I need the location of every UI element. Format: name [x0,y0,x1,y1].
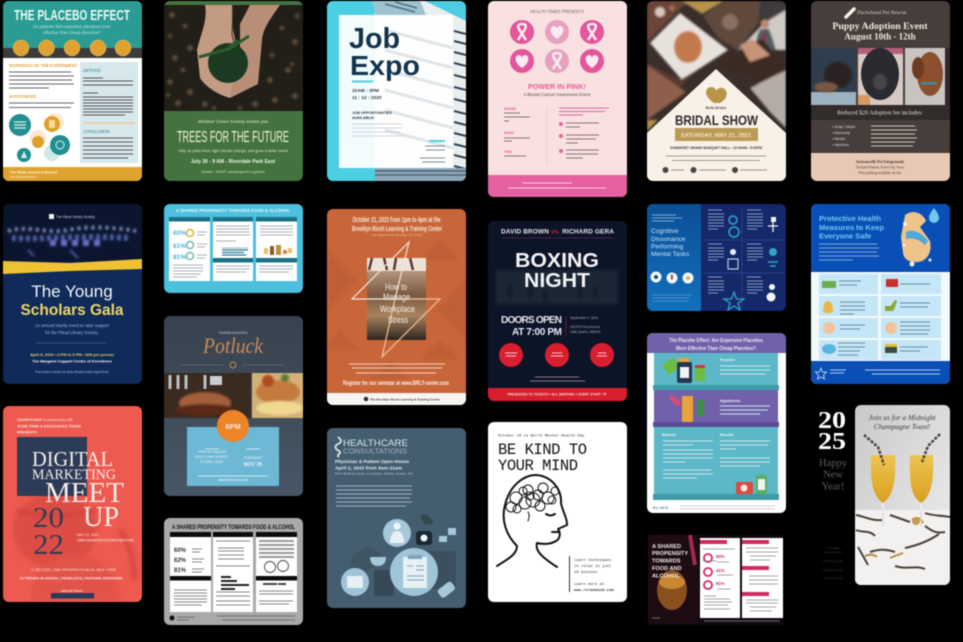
poster: How to Manage Workplace Stress [320,209,466,405]
poster: Be Kind to Your Mind [488,422,627,602]
poster: Job Expo: 11 : 12 : 2020 [352,95,382,101]
column panels [169,217,297,281]
section headings: Hypothesis [720,399,740,403]
side text: Learn more at [574,583,604,587]
date and venue: 302378 First Avenue [570,325,600,329]
icon grid: ribbons and hearts [510,20,604,73]
side text: 10 minutes [574,570,598,575]
poster: Power in Pink: WHEN [504,131,514,135]
headline [652,544,688,580]
photo [367,258,426,340]
champagne glasses [864,434,940,527]
event details: April 8, 2020 • 6 PM to 9 PM • $25 per person [30,352,115,357]
headline [32,447,124,533]
statistics: 60% [173,230,186,237]
organiser text: JOSIE PARK & ASSOCIATES TRADE [17,424,82,428]
text block: Windsor Green Society invites you [198,119,269,124]
date [77,533,135,542]
event details column: WHERE [504,107,516,111]
photo collage [647,1,786,131]
poster: Healthcare Consultations: Pima Medical Center of Lifestyle, Alvada, Ontario, WA [335,472,413,476]
section headings: Purpose [720,358,735,362]
poster: Thanksgiving Potluck [164,316,304,496]
footer strip [327,393,466,405]
event details [823,546,844,580]
icon: cupped hands with moss [197,5,280,98]
footer strip [488,388,627,401]
agenda column [559,108,609,115]
panel details: FLORAL PARK [200,460,224,464]
title: Measures to Keep [819,223,884,232]
poster: Thanksgiving Potluck: WWW.POTLUCK.COM [218,478,248,482]
date line: October 10 is World Mental Health Day [498,434,585,438]
footer band [811,361,950,384]
donut stats [704,554,712,589]
venue: SOMERSET GRAND BANQUET HALL • 10:00AM - 5:00PM [670,146,762,150]
year [33,502,64,561]
title: Dissonance [651,236,686,243]
tile icons [822,279,898,354]
page lines [703,548,778,611]
poster: Puppy Adoption Event: Free parking available on site [859,171,902,175]
greeting [819,458,848,492]
peach footer [811,153,950,181]
poster: Puppy Adoption Event [811,1,950,181]
poster: Digital Marketing Meet Up [3,406,142,602]
section headings [662,358,740,437]
event details: 65 Holly Street [823,568,843,572]
logo and heading: CONSULTATIONS [343,446,407,456]
sign-up button [51,589,94,598]
title: The Placebo Effect: Are Expensive Placebos [669,338,763,344]
fighter names: DAVID BROWN vs. RICHARD GERA [501,228,614,236]
sign-up button: SIGN UP TODAY [61,589,83,593]
subtitle: Do patients find expensive placebos more [33,24,112,29]
statistics: 60% [174,548,187,554]
table and text lines [216,541,250,605]
poster: Boxing Night: NIGHT [524,270,590,292]
cream panel [647,69,786,181]
title [819,214,884,240]
poster: 2025 champagne photo [855,405,950,585]
poster: Food and Alcohol, dark with pink: 41% [716,568,725,573]
title: Potluck [202,333,264,358]
poster: Bridal Show [647,1,786,181]
side text [574,558,614,593]
rescue name: Dachshund Pet Rescue [857,10,907,16]
headline: FOOD AND [652,566,682,572]
photo of person [13,492,134,602]
title: Cognitive [651,228,679,235]
poster: The Placebo Effect [3,1,142,181]
description [819,244,879,260]
poster: Trees for the Future: July 30 - 9 AM - Riverdale Park East [191,159,275,165]
poster: Puppy Adoption Event: August 10th - 12th [844,32,916,42]
poster: Healthcare Consultations: April 2, 2020 from 9am-11am [335,466,402,472]
opportunities text: JOB OPPORTUNITIES [352,111,392,115]
ticket line [530,377,585,381]
details: +1 352 5709 | 3382 PROSPECTS BLVD, NEW YORK [30,568,116,572]
event name: THANKSGIVING [218,330,248,335]
panel details: NOV 26 [244,462,262,468]
poster title in photo [380,282,415,325]
poster: Food and Alcohol, teal [164,204,303,293]
date banner: SATURDAY, MAY 21, 2021 [681,133,752,139]
icon row [13,40,131,56]
date: MAY 12, 2022 [77,533,99,537]
headline: TOWARDS [652,558,681,564]
orange time badge: 8PM [225,422,241,431]
medicine kit icon [736,475,767,494]
checklist: • Soap / Wash [832,125,855,129]
poster: Cognitive Dissonance [647,204,786,311]
poster: Food and Alcohol, dark with pink: 81% [716,581,725,586]
poster: How to Manage Workplace Stress: 155 Maple Street, Brooklyn, NY 11215 [372,233,422,237]
poster: The Young Scholars Gala: Scholars Gala [20,302,124,319]
poster: The Placebo Effect: The Ritual Journal of Science [10,170,58,174]
poster title in photo: Stress [388,315,408,325]
triangle pattern [320,240,466,380]
column panels [170,532,297,612]
poster: Power in Pink [488,1,627,197]
title [651,228,690,258]
statistics [174,548,187,574]
greeting: Year! [822,482,844,492]
statistics [173,230,186,261]
year: 22 [33,529,64,561]
photo of crowd [3,204,142,262]
dining photos [164,373,304,418]
poster: The Placebo Effect: HYPOTHESIS [9,94,36,99]
poster: Be Kind to Your Mind: YOUR MIND [498,457,578,475]
poster: Boxing Night: PRESENTED TO TICKETS + ALL SHIPPING + EVENT STAFF: TF [507,392,607,396]
banner [811,105,950,120]
left text column: WORKINGS OF THE EXPERIMENT [9,63,78,68]
poster: Protective Health Measures [811,204,950,384]
icons column [724,216,778,310]
pink headers [700,540,769,596]
year [818,408,846,455]
poster: Puppy Adoption Event: Reduced $20 Adoption fee includes: [837,110,923,116]
poster: Healthcare Consultations [327,428,466,608]
right panel: method and conclusion [80,62,138,163]
white pages [700,538,783,618]
text: brand: Bella Brides [706,106,726,110]
white panel [339,15,453,168]
pill bottle icons [662,357,705,422]
marble table [855,510,950,585]
orange time badge [217,410,249,442]
description lines [336,486,412,506]
poster: How to Manage Workplace Stress: The Brooklyn Ricoh Learning & Training Center [370,398,441,402]
poster: How to Manage Workplace Stress: Brooklyn Ricoh Learning & Training Center [352,224,442,233]
year: 20 [33,502,64,534]
icon: gold hearts [706,87,727,103]
date banner [675,128,758,141]
header: October 21, 2023 from 1pm to 4pm at the [352,215,441,224]
checklist: • Vaccines [832,143,849,147]
description lines [349,364,445,373]
icon and society name: The Ritual Library Society [56,215,95,219]
left photo [648,535,698,623]
headline: MARKETING [32,467,116,483]
checklist: • Neuter [832,137,846,141]
poster: The Young Scholars Gala: Purchase a ticket at www.ritualsociety.org/events [35,370,109,374]
circle icons [9,113,70,162]
poster: Placebo, shelves [647,333,786,513]
presenter line: HEALTH TIMES PRESENTS [530,9,584,14]
headline: MEET [45,477,124,509]
poster: Food and Alcohol, dark with pink: 60% [716,554,725,559]
event details: New York City [824,576,843,580]
grid of cards [703,208,784,308]
statistics: 61% [173,243,186,250]
icon: head with tangled brain [497,475,567,567]
title: POWER IN PINK! [528,82,586,91]
date and time: 10AM : 3PM [352,88,379,94]
title: A SHARED PROPENSITY TOWARDS FOOD & ALCOHOL [176,208,291,213]
headline: ALCOHOL [652,574,680,580]
arena photo [496,270,618,304]
social icons [662,167,767,173]
shelf sections [653,353,779,500]
poster: Placebo, shelves: More Effective Than Cheap Placebos? [676,346,756,352]
medical icons [341,514,456,599]
checklist: • Microchip [832,131,850,135]
event details: Thursday [827,546,840,550]
poster title in photo: Workplace [380,304,415,314]
poster: Food and Alcohol, greyscale [164,518,303,625]
year: 25 [818,429,846,455]
poster: The Placebo Effect: on Consumerism [10,175,36,179]
organiser text [17,418,82,434]
logo and heading: HEALTHCARE [343,438,408,449]
poster: Job Expo [327,1,466,181]
event title: Physician & Patient Open House [335,459,409,465]
building photo [372,1,466,181]
title: Everyone Safe [819,232,871,240]
checklist [832,125,855,147]
icon: bone [846,9,854,17]
title: Job [349,23,400,55]
greeting: Happy [819,458,848,469]
panel details: PIER 40 TRAILER [198,450,226,454]
icon: washing hands and water drop [901,208,939,266]
poster: Trees for the Future: Details + RSVP: windsorgreen.org/trees [201,170,265,174]
tile grid [819,274,941,360]
statistics: 81% [173,254,186,261]
headline: UP [83,501,119,533]
poster: Boxing Night: AT 7:00 PM [512,327,562,338]
panel details [196,450,263,468]
title: BRIDAL SHOW [675,113,758,128]
side text: Learn techniques [574,558,612,563]
footer band [488,175,627,197]
event details: December 31 [824,550,842,554]
section headings: Results [720,433,734,437]
title: THE PLACEBO EFFECT [14,8,130,24]
tile text lines [838,281,930,355]
navy block [17,437,87,496]
footer: KLIKO [653,506,669,510]
title: Puppy Adoption Event [832,21,928,32]
icon heads [650,272,694,284]
poster title in photo: Manage [383,292,410,302]
poster title in photo: How to [385,282,407,292]
poster: The Placebo Effect: METHOD [83,68,102,73]
year: 20 [818,408,846,434]
poster: Boxing Night [488,221,627,401]
icon and society name [49,214,95,219]
forest floor photo [164,5,303,111]
title: TREES FOR THE FUTURE [177,129,289,146]
call to action: Register for our seminar at www.BRLT-center.com [343,380,449,387]
panel details: TUESDAY [244,455,263,460]
blue info panel [187,427,279,486]
footer band [3,167,142,181]
poster: Job Expo: AVAILABLE! [352,116,374,120]
poster: Puppy Adoption Event: Jacksonville Pet Fairgrounds [856,160,905,164]
title: A SHARED PROPENSITY TOWARDS FOOD & ALCOHOL [172,524,295,531]
photos of dogs [811,48,950,105]
side text: to relax in just [574,564,611,569]
poster: Job Expo: Expo [350,50,420,81]
description: An annual charity event to raise support [35,323,110,328]
poster: The Young Scholars Gala [3,204,142,384]
poster: The Young Scholars Gala: The Margaret Coppart Centre of Excellence [32,358,113,364]
greeting: New [823,470,843,480]
zig-zag lightning lines [352,242,440,357]
statistics: 62% [174,558,187,564]
red circles [499,343,614,367]
poster: Digital Marketing Meet Up: 10 TRENDS IN DIGITAL | PANELISTS | FEATURE SPEAKERS [20,576,123,580]
title: Mental Tasks [651,251,690,258]
panel details: 8115 E OAK STREET [196,455,228,459]
statistics: 81% [174,568,187,574]
yellow banner [3,259,142,274]
poster: Puppy Adoption Event: Orchard Station, Iowa City, Iowa [856,166,904,170]
section headings: Method [662,433,676,437]
title: Performing [651,244,684,250]
title: The Young [31,282,113,301]
poster: 2025 champagne photo: Champagne Toast! [874,422,931,431]
date and venue [570,316,601,334]
subtitle: A Breast Cancer Awareness Event [523,92,591,97]
drink bottles [264,245,292,255]
logo and heading [335,437,408,457]
headline: DIGITAL [32,447,113,471]
illustrations [263,560,288,584]
poster: Power in Pink: TIME [504,150,512,154]
title: BOXING [515,250,599,272]
poster: Food and Alcohol, dark with pink [648,535,783,625]
poster: 2025 New Year text panel [818,408,848,580]
small icons [186,230,194,260]
side text: www.relaxmind.com [574,588,614,593]
title: Protective Health [819,214,881,223]
poster: The Young Scholars Gala: for the Ritual Library Society. [45,330,99,335]
section lines [663,366,770,478]
event details: Central Lounge [823,559,844,563]
footer [170,616,295,620]
poster: The Placebo Effect: CONCLUSION [83,129,110,134]
date and venue: September 9, 2020 [570,316,598,320]
title: BE KIND TO [498,441,587,459]
date: STAR CONVENTION CENTER, NEW YORK [77,538,135,542]
date and venue: Little Quarts, ABSHD [570,330,601,334]
intro text [652,215,682,221]
details: Help us plant trees, fight climate change, and grow a better world [178,149,288,153]
invitation title: Join us for a Midnight [868,413,936,422]
headline: A SHARED [652,544,681,550]
poster: Trees for the Future [164,1,303,181]
doors open text: DOORS OPEN [501,315,562,326]
poster: The Placebo Effect: effective than cheap placebos? [43,30,101,35]
organiser text: PRESENTS [17,430,37,434]
organiser text: CHURCH MAP in partnership with [17,418,73,422]
headline: PROPENSITY [652,551,688,557]
